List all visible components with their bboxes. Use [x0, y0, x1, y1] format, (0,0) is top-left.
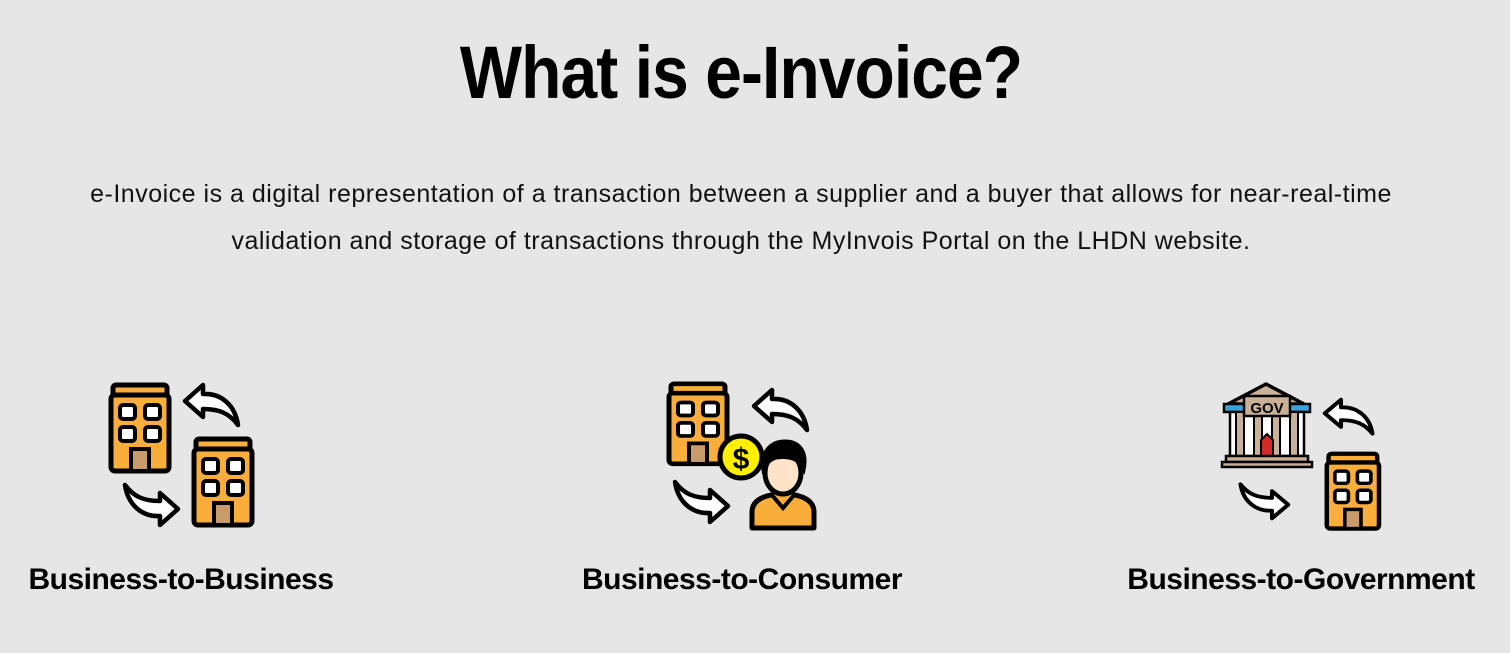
intro text — [90, 180, 1392, 255]
intro text: validation and storage of transactions through the MyInvois Portal on the LHDN website. — [231, 227, 1251, 255]
label: B2G: Business-to-Government — [1127, 563, 1475, 596]
icon: business to consumer: $ — [733, 443, 750, 476]
label: B2C: Business-to-Consumer — [582, 563, 902, 596]
icon: business to government — [1222, 384, 1379, 529]
icon: business to business — [111, 385, 252, 525]
icon: business to consumer — [669, 384, 814, 528]
intro text: e-Invoice is a digital representation of a transaction between a supplier and a buyer that allows for near-real-time — [90, 180, 1392, 208]
icon: business to government: GOV — [1250, 400, 1284, 417]
title: What is e-Invoice? — [460, 31, 1022, 114]
label: B2B: Business-to-Business — [28, 563, 334, 596]
